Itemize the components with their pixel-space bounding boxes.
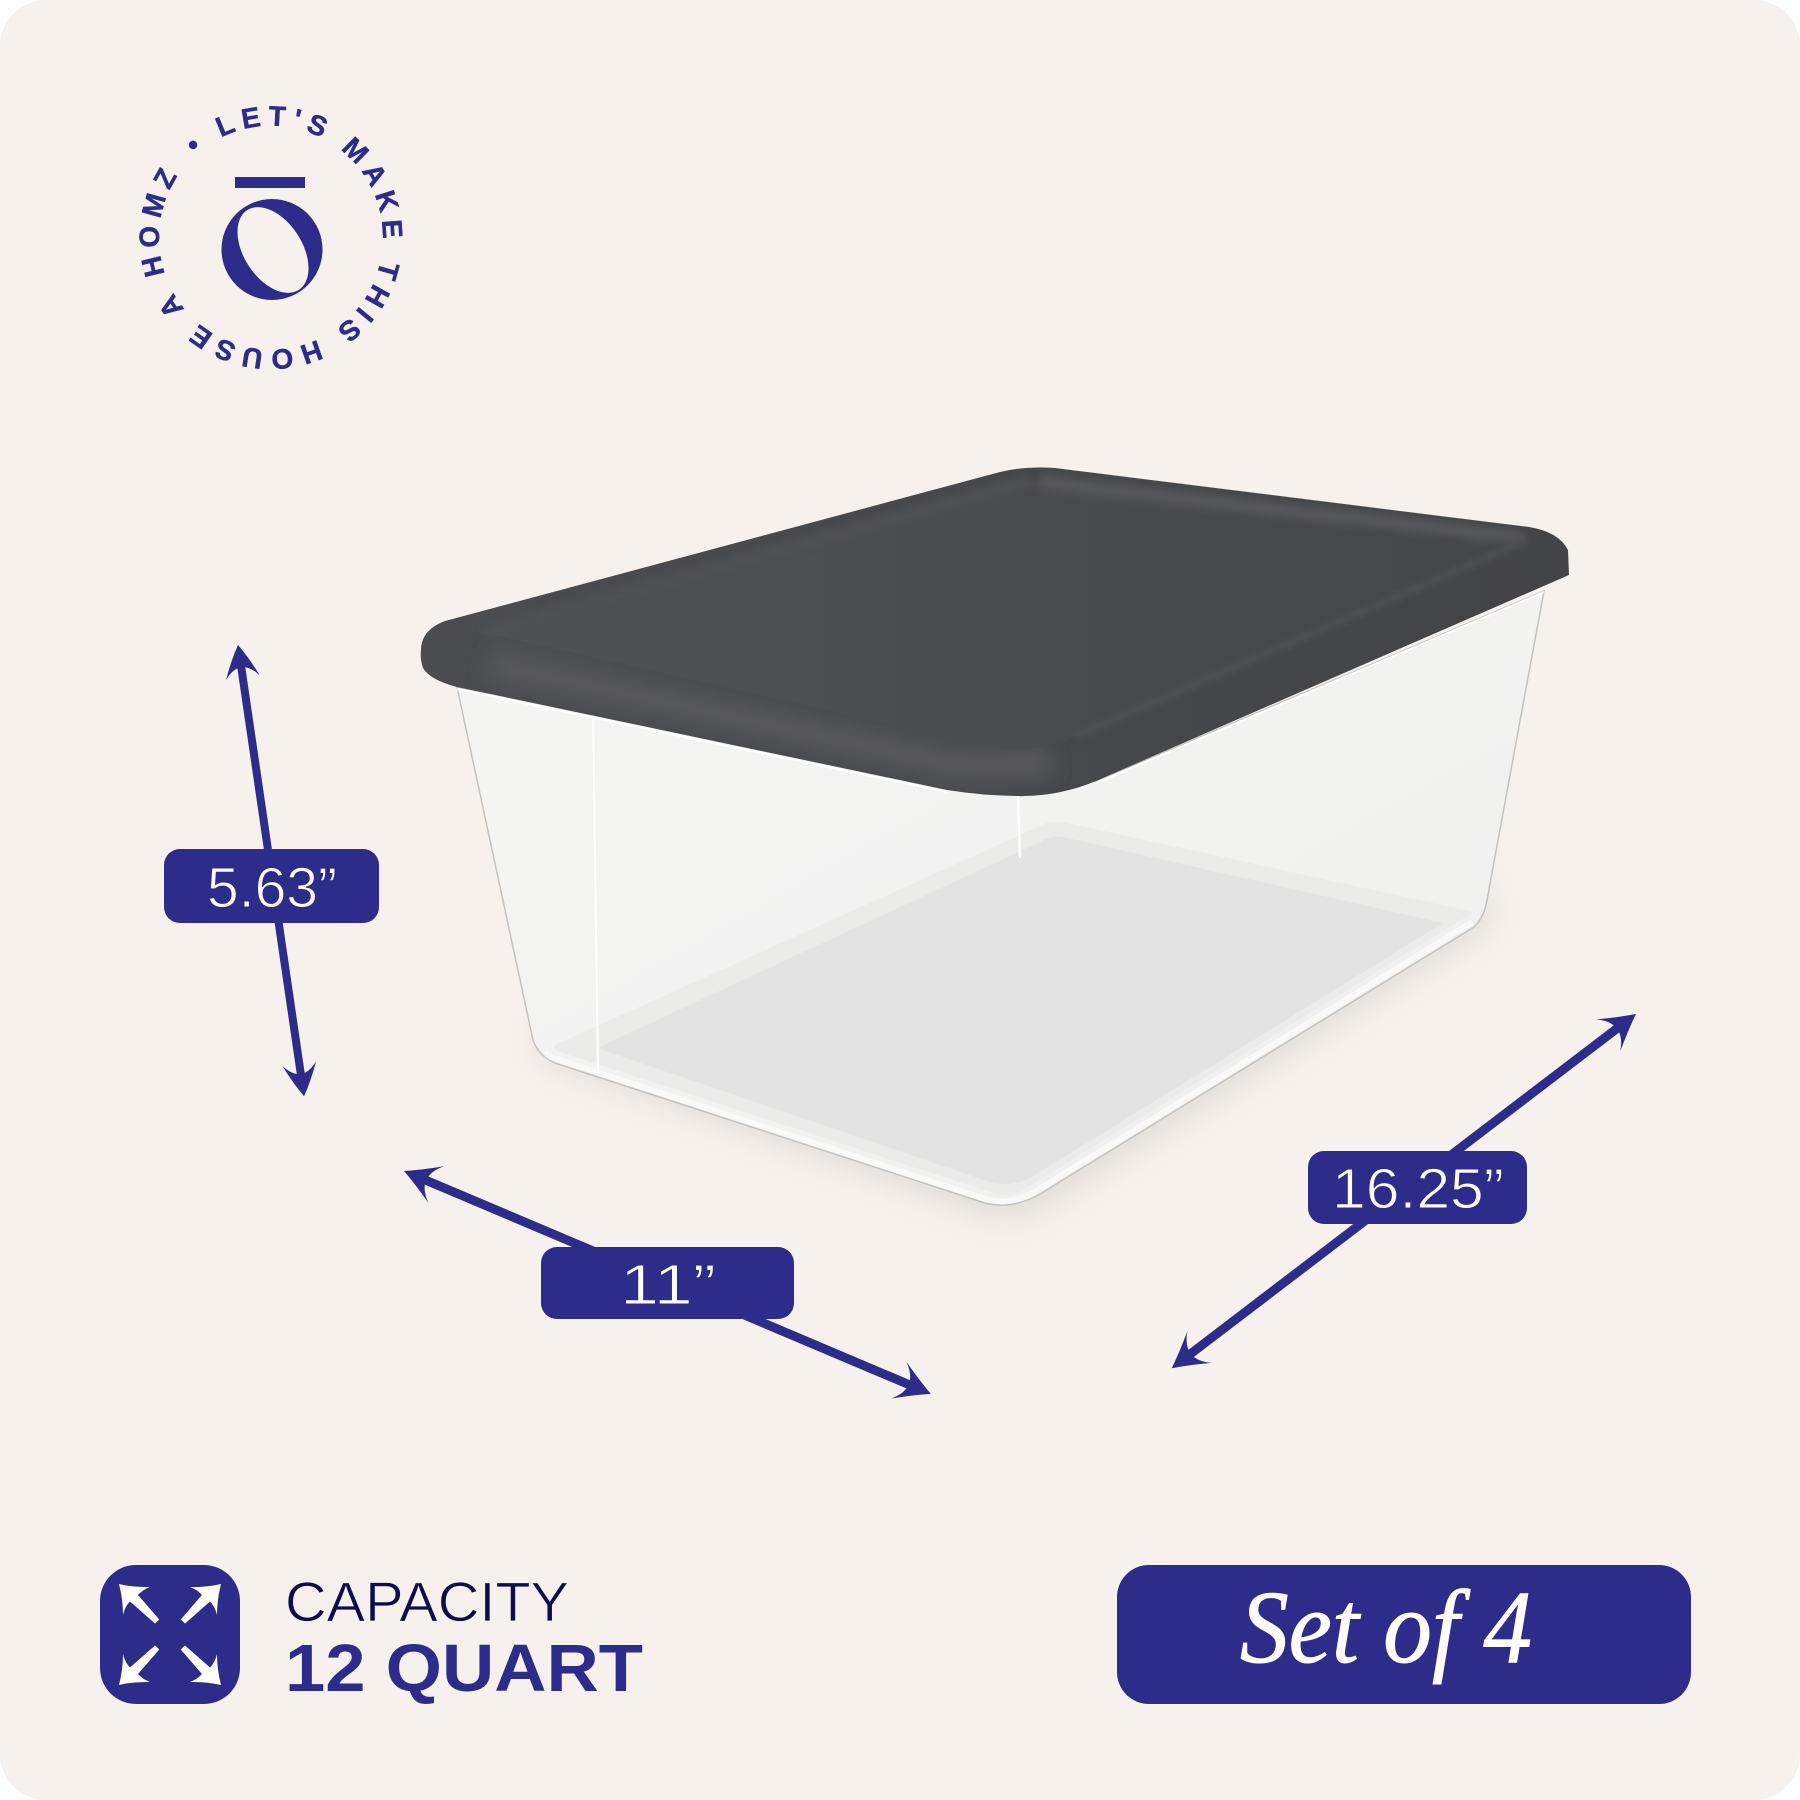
height label (164, 849, 379, 923)
width label: 11” (620, 1253, 716, 1317)
circular slogan: • LET'S MAKE THIS HOUSE A HOMZ (139, 106, 403, 369)
box floor inner (597, 837, 1443, 1184)
lid outer rim (421, 468, 1569, 796)
lid edge glints (457, 592, 1544, 792)
length label: 16.25” (1332, 1157, 1504, 1221)
set of 4 badge: Set of 4 (1240, 1570, 1532, 1685)
lid back rim highlight (1040, 482, 1525, 538)
capacity text (285, 1570, 643, 1706)
logo mark: o with macron (222, 177, 323, 306)
lid side rim highlight (1191, 548, 1513, 688)
box shadow (540, 880, 1490, 1217)
height label: 5.63” (207, 856, 337, 920)
width label (541, 1247, 794, 1319)
box corner seams (593, 716, 1020, 1073)
capacity icon (100, 1565, 240, 1704)
lid front rim highlight (490, 664, 1050, 766)
lid inner panel (482, 480, 1526, 749)
lid shading (482, 480, 1526, 766)
width dimension arrow (396, 1153, 939, 1412)
box floor outer band (554, 822, 1474, 1195)
box front rim highlight (545, 922, 1472, 1201)
lid back-left rim highlight (854, 482, 1016, 528)
set of 4 badge (1117, 1565, 1691, 1704)
clear box body (457, 591, 1544, 1205)
height dimension arrow (221, 643, 321, 1099)
length label (1308, 1151, 1527, 1224)
capacity text: CAPACITY (285, 1570, 569, 1633)
brand logo badge (139, 106, 403, 369)
length dimension arrow (1160, 998, 1648, 1384)
capacity text: 12 QUART (285, 1631, 643, 1706)
product: storage box (421, 468, 1569, 1217)
